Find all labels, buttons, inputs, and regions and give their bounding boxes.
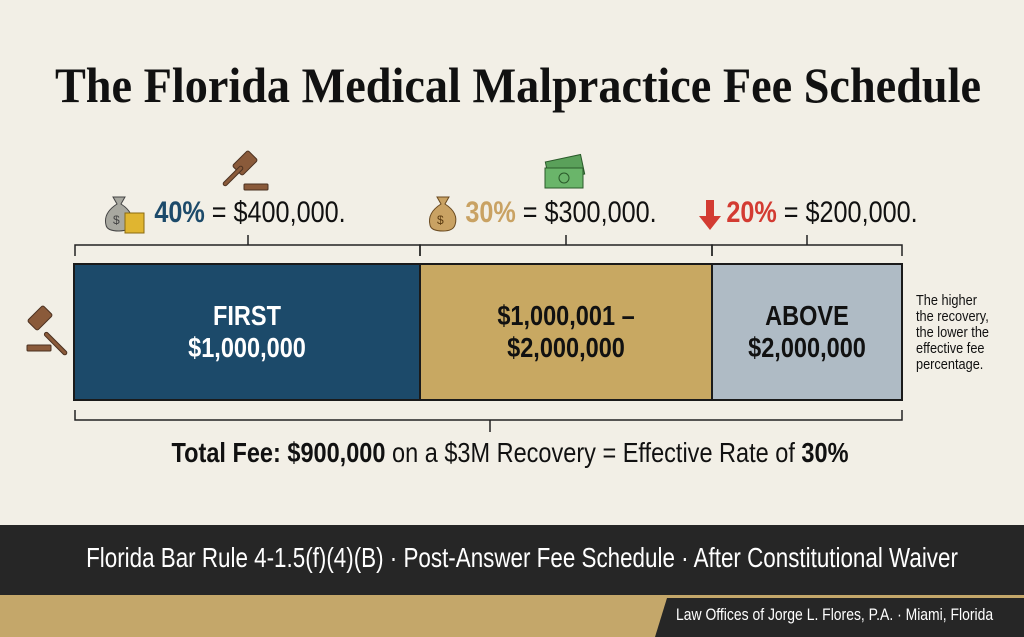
segment label: middle: [497, 300, 635, 363]
icon: money bag gold: [429, 197, 456, 231]
segment label: middle: $1,000,001 –: [497, 300, 635, 331]
icon: money bag with coins: [105, 197, 144, 233]
icon: red down arrow: [699, 200, 721, 230]
footer bands: [0, 525, 1024, 595]
segment label: above: [748, 300, 866, 363]
icon: banknotes: [545, 154, 585, 188]
segment label: first: $1,000,000: [188, 332, 306, 363]
label: 20%: 20% = $200,000.: [726, 196, 918, 229]
segment label: above: ABOVE: [765, 300, 849, 331]
icon: money bag with coins: $: [113, 213, 120, 227]
bar segments: [74, 264, 420, 400]
segment label: above: $2,000,000: [748, 332, 866, 363]
icon: gavel top: [222, 150, 268, 190]
footer firm name: Law Offices of Jorge L. Flores, P.A. · Miami, Florida: [676, 605, 993, 624]
side note: the lower the: [916, 324, 989, 341]
segment label: first: [188, 300, 306, 363]
side note: effective fee: [916, 340, 985, 357]
segment label: middle: $2,000,000: [507, 332, 625, 363]
total fee: Total Fee: $900,000 on a $3M Recovery = Effective Rate of 30%: [171, 437, 849, 468]
icon: gavel left: [27, 305, 68, 356]
segment label: first: FIRST: [213, 300, 281, 331]
top brackets: [75, 235, 902, 432]
side note: [916, 292, 989, 373]
side note: The higher: [916, 292, 977, 309]
label: 40%: 40% = $400,000.: [154, 196, 346, 229]
footer rule text: Florida Bar Rule 4-1.5(f)(4)(B) · Post-Answer Fee Schedule · After Constitutional Waiver: [86, 542, 958, 573]
side note: percentage.: [916, 356, 983, 373]
icon: money bag gold: $: [437, 213, 444, 227]
label: 30%: 30% = $300,000.: [465, 196, 657, 229]
side note: the recovery,: [916, 308, 989, 325]
title: The Florida Medical Malpractice Fee Schedule: [55, 57, 981, 113]
